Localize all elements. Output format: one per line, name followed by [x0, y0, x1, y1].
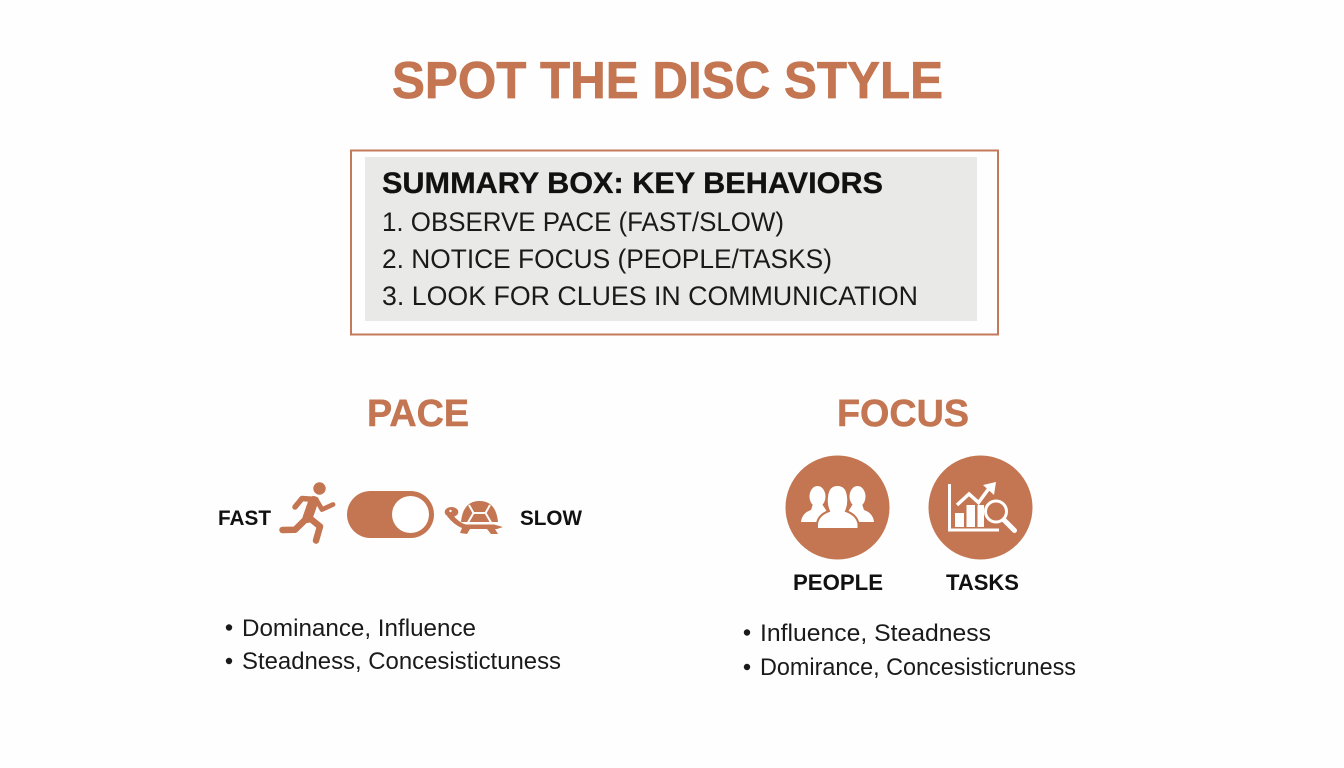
focus list: Influence, Steadness — [760, 620, 991, 647]
summary heading: SUMMARY BOX: KEY BEHAVIORS — [382, 167, 883, 200]
panel: summary box — [351, 150, 998, 334]
icon: runner — [282, 482, 333, 540]
summary item 1: 1. OBSERVE PACE (FAST/SLOW) — [382, 207, 784, 237]
label: fast: FAST — [218, 507, 271, 530]
focus list — [744, 620, 1076, 681]
summary item 2: 2. NOTICE FOCUS (PEOPLE/TASKS) — [382, 244, 832, 274]
focus list: Domirance, Concesisticruness — [760, 654, 1076, 681]
icon: toggle switch — [347, 491, 434, 538]
pace list — [226, 615, 561, 675]
title: SPOT THE DISC STYLE — [392, 52, 943, 110]
icon: people circle — [786, 456, 890, 560]
label: slow: SLOW — [520, 507, 582, 530]
icon: tasks circle — [928, 456, 1032, 560]
label: tasks: TASKS — [946, 570, 1019, 595]
summary item 3: 3. LOOK FOR CLUES IN COMMUNICATION — [382, 281, 918, 311]
heading: pace: PACE — [367, 393, 469, 435]
heading: focus: FOCUS — [837, 393, 969, 435]
label: people: PEOPLE — [793, 570, 883, 595]
icon: turtle — [445, 501, 503, 534]
pace list: Dominance, Influence — [242, 615, 476, 642]
pace list: Steadness, Concesistictuness — [242, 648, 561, 675]
